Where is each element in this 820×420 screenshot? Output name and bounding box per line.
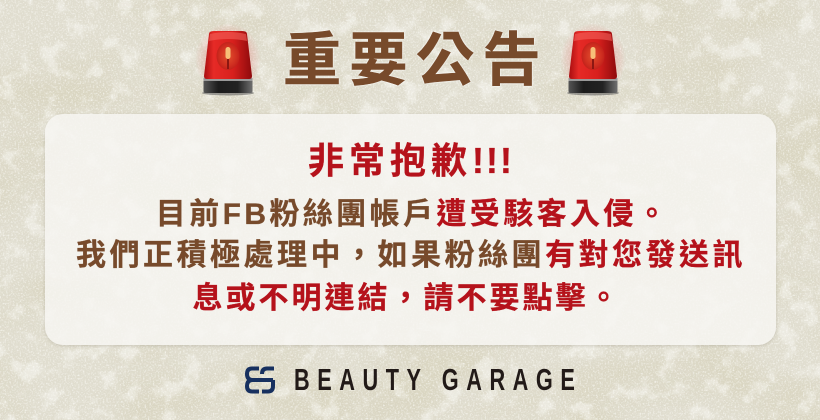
logo: Beauty Garage	[245, 362, 582, 397]
text: line three: 息或不明連結，請不要點擊。	[192, 282, 622, 315]
icon: right red beacon	[563, 26, 623, 96]
icon: logo mark	[245, 366, 275, 394]
text: line one: 目前FB粉絲團帳戶遭受駭客入侵。	[156, 198, 670, 231]
panel: announcement	[45, 114, 776, 345]
heading: apology: 非常抱歉!!!	[308, 140, 514, 181]
title: 重要公告	[283, 28, 549, 93]
icon: left red beacon	[198, 26, 258, 96]
text: line two: 我們正積極處理中，如果粉絲團有對您發送訊	[76, 239, 746, 272]
text: brand name: BEAUTY GARAGE	[294, 362, 582, 397]
